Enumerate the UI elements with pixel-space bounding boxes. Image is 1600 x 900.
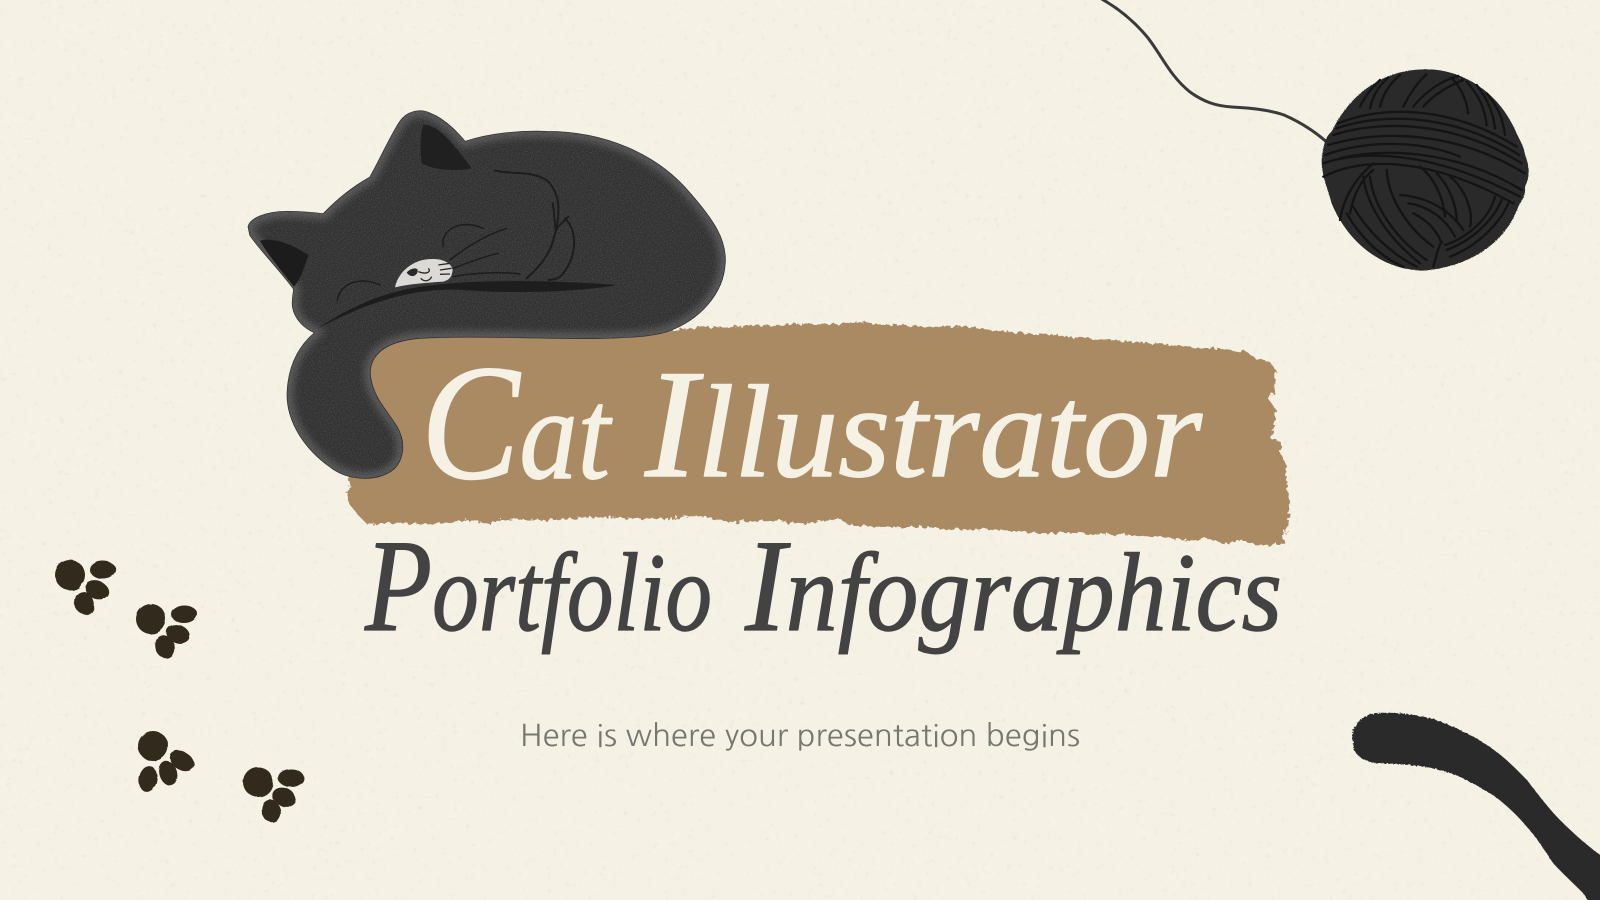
title line 2 [364,512,1282,659]
cat ear inner top [421,125,472,170]
icon: paw print 1 [55,560,116,618]
cat tail corner [1352,713,1600,900]
cat ear inner left [260,240,308,287]
cat eyes whiskers and paw lines [337,171,574,300]
subtitle: Here is where your presentation begins [520,721,1080,751]
title line 1: Cat [421,331,613,514]
icon: ball of yarn [1322,69,1529,271]
icon: paw print 3 [137,731,198,793]
cat body [248,111,725,478]
icon: paw print 4 [243,767,304,826]
title line 1 [421,331,1203,514]
title line 2: Infographics [744,512,1282,659]
cat muzzle [395,259,453,287]
title line 1: Illustrator [644,338,1203,510]
cat arm shadow [318,281,617,328]
title line 2: Portfolio [364,512,712,659]
brush stroke banner [346,322,1290,546]
icon: paw print 2 [136,604,197,662]
icon: sleeping cat [248,110,726,479]
yarn thread [1100,0,1330,145]
